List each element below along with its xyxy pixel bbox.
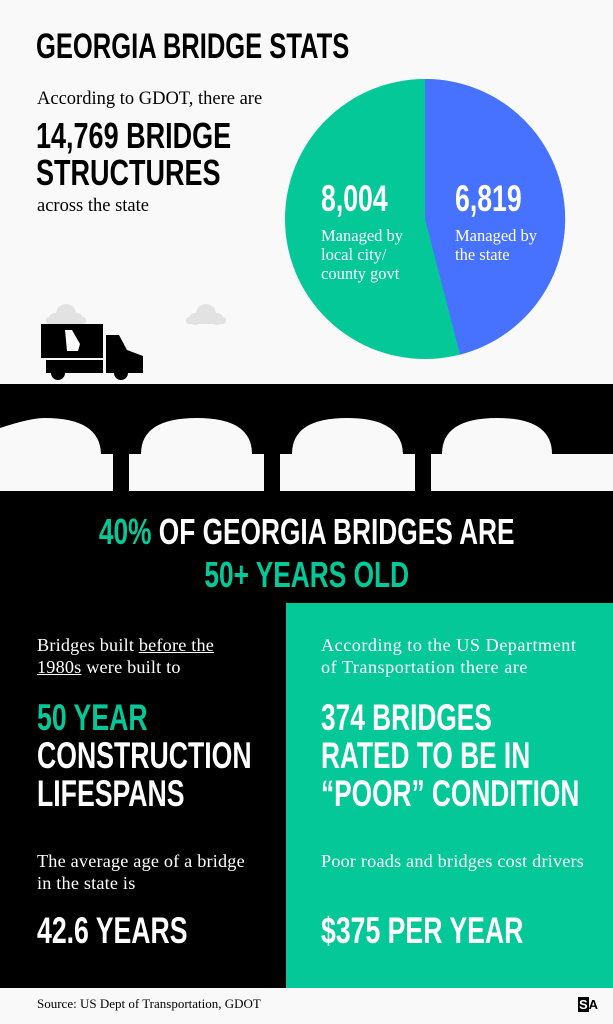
pie label: local: county govt — [321, 264, 399, 283]
pie label: state: 6,819 — [455, 178, 522, 219]
stat: 42.6 years: 42.6 YEARS — [37, 910, 188, 951]
stat: 50 year lifespans: 50 YEAR — [37, 697, 148, 738]
text: average age: The average age of a bridge — [37, 851, 245, 871]
stat: 50 year lifespans — [37, 697, 252, 814]
pie label: local: local city/ — [321, 245, 387, 264]
stat: 374 bridges: 374 BRIDGES — [321, 697, 492, 738]
headline stat: bridge structures: 14,769 BRIDGE — [36, 115, 231, 156]
pie chart — [41, 79, 566, 380]
pie label: local: 8,004 — [321, 178, 388, 219]
panel left: lifespan text: Bridges built before the — [37, 635, 214, 655]
logo: SA — [579, 997, 598, 1012]
pie label: state — [455, 178, 537, 264]
headline stat: bridge structures: STRUCTURES — [36, 152, 221, 193]
panel left: lifespan text — [37, 635, 214, 677]
subtext: across the state — [37, 196, 149, 216]
stat: $375 per year: $375 PER YEAR — [321, 910, 523, 951]
panel left: lifespan text: 1980s were built to — [37, 657, 181, 677]
text: cost: Poor roads and bridges cost drivers — [321, 851, 584, 871]
pie: state slice — [425, 79, 565, 355]
bridge — [0, 384, 613, 988]
icon: truck — [41, 324, 143, 380]
pie label: local: Managed by — [321, 226, 403, 245]
headline: 40% of bridges: 50+ YEARS OLD — [204, 554, 409, 595]
stat: 50 year lifespans: LIFESPANS — [37, 773, 185, 814]
panel right: DOT text: of Transportation there are — [321, 657, 528, 677]
stat: 374 bridges: “POOR” CONDITION — [321, 773, 579, 814]
icon: cloud 2 — [186, 304, 226, 325]
panel right: DOT text: According to the US Department — [321, 635, 576, 655]
title: GEORGIA BRIDGE STATS — [36, 27, 349, 66]
headline: 40% of bridges — [99, 511, 514, 595]
text: average age: in the state is — [37, 873, 135, 893]
headline stat: bridge structures — [36, 115, 231, 193]
pie label: state: the state — [455, 245, 510, 264]
icon: cloud 1 — [46, 304, 86, 325]
headline: 40% of bridges: 40% OF GEORGIA BRIDGES ARE — [99, 511, 514, 552]
pie: local govt slice — [285, 79, 565, 359]
stat: 374 bridges — [321, 697, 579, 814]
footer source: Source: US Dept of Transportation, GDOT — [37, 996, 261, 1011]
stat: 374 bridges: RATED TO BE IN — [321, 735, 530, 776]
panel: teal — [286, 603, 613, 988]
pie label: state: Managed by — [455, 226, 537, 245]
text: average age — [37, 851, 245, 893]
stat: 50 year lifespans: CONSTRUCTION — [37, 735, 252, 776]
intro text: According to GDOT, there are — [37, 89, 262, 109]
panel right: DOT text — [321, 635, 576, 677]
pie label: local — [321, 178, 403, 283]
